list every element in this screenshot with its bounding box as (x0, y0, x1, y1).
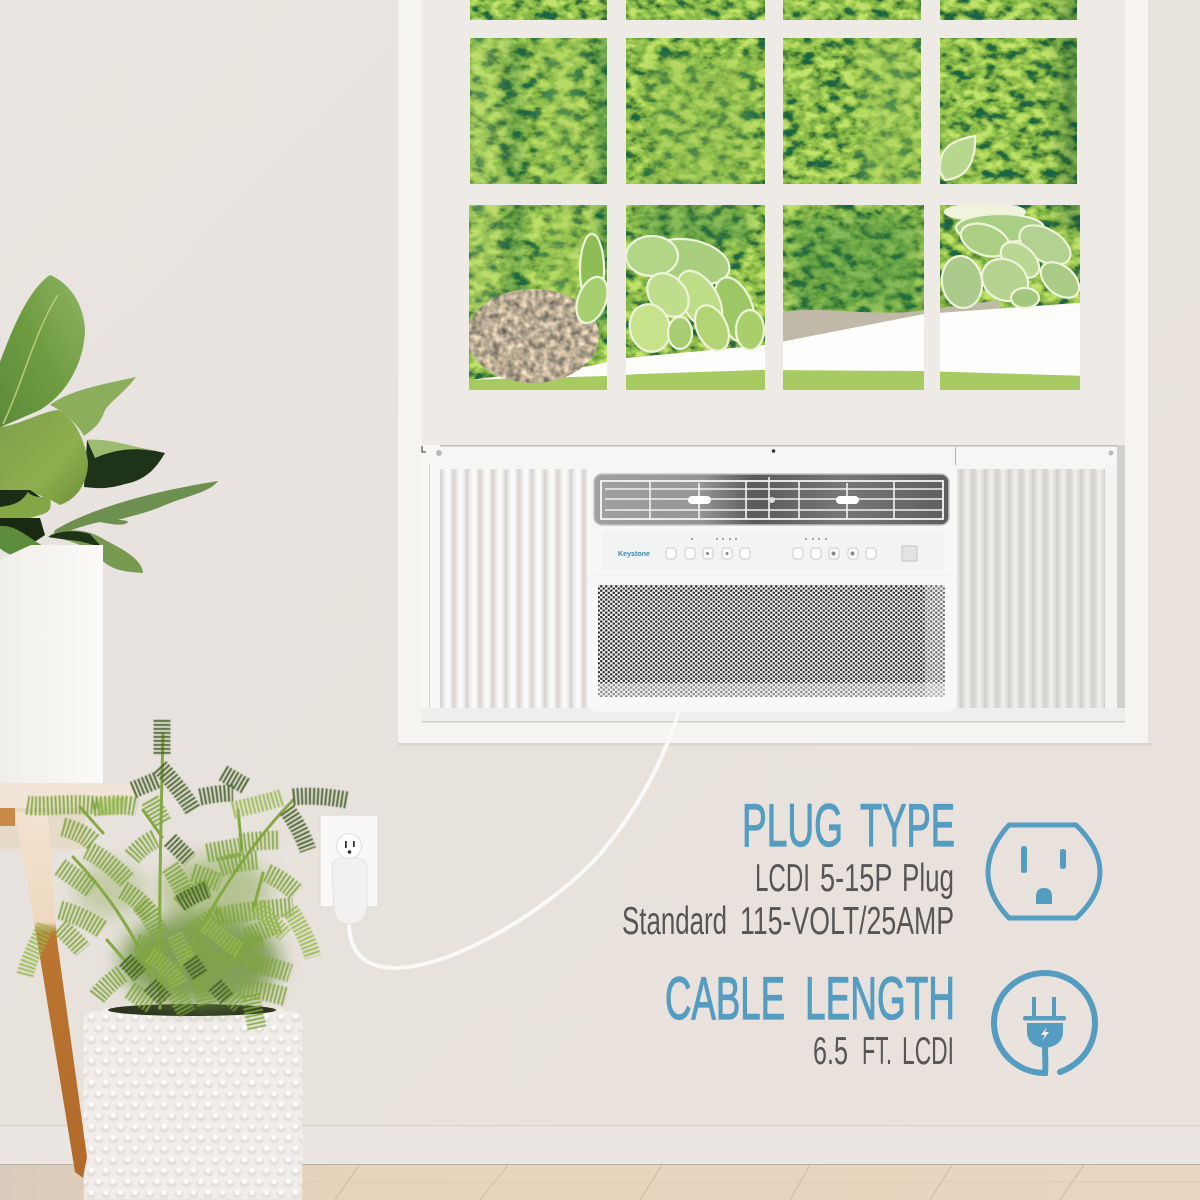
power cable (349, 714, 678, 968)
fern body shading (75, 855, 280, 1006)
hedge foliage (460, 0, 1090, 395)
fern fronds mid green (27, 800, 297, 1028)
side table (0, 783, 140, 1178)
text: plug type line one: Plug (902, 857, 954, 900)
icon: wall outlet (988, 825, 1100, 918)
white vase (0, 545, 103, 783)
wood floor (0, 1165, 1200, 1200)
hosta right (939, 136, 1086, 311)
garden path stones (783, 300, 1000, 345)
icon: power plug in circular cord (994, 973, 1095, 1073)
front perforated grille (587, 575, 957, 712)
text: cable length value: 6.5 (813, 1030, 848, 1073)
fern fronds dark (125, 720, 347, 1000)
heading: cable length: CABLE (665, 965, 785, 1032)
air conditioner unit (587, 463, 957, 712)
text: plug type line one: 5-15P (820, 857, 892, 900)
heading: plug type: PLUG (742, 792, 843, 859)
unit body (587, 463, 957, 712)
wall outlet (320, 815, 378, 907)
fern fronds bright (25, 797, 313, 985)
heading: plug type: TYPE (860, 792, 955, 859)
plug body (332, 858, 367, 924)
heading: cable length: LENGTH (805, 965, 955, 1032)
control panel: Keystone (618, 549, 650, 558)
text: plug type line two: Standard (622, 900, 727, 943)
white garden path (470, 302, 1080, 380)
view through window panes (460, 0, 1090, 395)
top air vent (594, 474, 949, 525)
fern plant (25, 720, 347, 1028)
lawn (469, 370, 1080, 390)
fern stems (73, 735, 293, 1008)
hedge shading (470, 0, 1084, 360)
control panel (602, 530, 943, 571)
text: cable length value: LCDI (902, 1030, 954, 1073)
hosta centre (571, 232, 764, 356)
air conditioner side panels and rails (422, 445, 1125, 722)
pink shrub (469, 289, 599, 383)
baseboard (0, 1125, 1200, 1166)
white dotted planter (84, 1004, 302, 1200)
text: plug type line one: LCDI (755, 857, 810, 900)
text: plug type line two: 115-VOLT/25AMP (740, 900, 954, 943)
window frame (398, 0, 1152, 746)
large-leaf plant (0, 275, 218, 573)
text: cable length value: FT. (862, 1030, 892, 1073)
